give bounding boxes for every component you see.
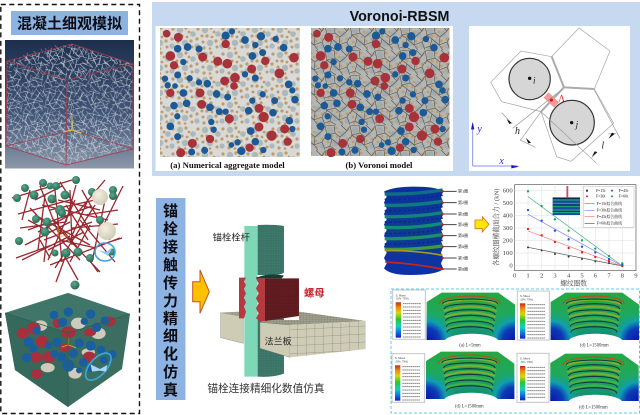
diagram: RBSM element pair: i xyxy=(533,75,536,85)
axis tick labels: 100 xyxy=(503,250,513,257)
flange plate xyxy=(221,312,366,357)
image: threaded bolt section with turn labels: 第8圈 xyxy=(458,265,468,271)
caption: 锚栓连接精细化数值仿真 xyxy=(207,382,325,395)
axis tick labels: 600 xyxy=(503,188,513,195)
axis tick labels: 7 xyxy=(607,273,611,280)
legend xyxy=(583,187,634,227)
axis tick labels: 300 xyxy=(503,225,513,232)
image: threaded bolt section with turn labels: 第4圈 xyxy=(458,221,468,227)
heading: concrete mesoscale simulation: 混凝土细观模拟 xyxy=(17,14,122,32)
nut xyxy=(239,274,299,321)
axis tick labels: 400 xyxy=(503,213,513,220)
chart: Voronoi model xyxy=(311,28,450,170)
diagram: anchor bolt finite element model xyxy=(207,225,366,395)
image: threaded bolt section with turn labels: 第5圈 xyxy=(458,232,468,238)
contour: L=1500mm bottom right: S, Mises xyxy=(520,357,531,361)
diagram: RBSM element pair: l xyxy=(601,140,604,151)
axis tick labels: 9 xyxy=(634,273,638,280)
contour: L=1500mm bottom right: (5%: 75%) xyxy=(521,360,533,364)
heading: anchor bolt contact force simulation: 接 xyxy=(163,239,178,256)
axis tick labels: 2 xyxy=(540,273,543,280)
axis tick labels: 200 xyxy=(503,237,513,244)
contour: L=1500mm bottom left xyxy=(392,352,514,409)
axis titles: 螺纹圈数 xyxy=(560,278,587,287)
legend: F=30t xyxy=(596,194,606,199)
contour: L=1500mm bottom right: (d) L=1500mm xyxy=(579,406,608,411)
contour: L=5mm: (a) L=5mm xyxy=(459,343,481,348)
contour: L=1500mm top right xyxy=(517,291,639,348)
heading: anchor bolt contact force simulation: 仿 xyxy=(163,363,178,381)
axis tick labels: 0 xyxy=(513,273,517,280)
panel: concrete mesoscale simulation xyxy=(1,4,139,414)
axis tick labels: 0 xyxy=(509,262,513,269)
axis tick labels xyxy=(503,188,638,280)
diagram: RBSM element pair xyxy=(471,28,620,168)
contour: L=5mm: (5%: 75%) xyxy=(396,297,409,301)
arrow: to bolt model xyxy=(193,270,209,313)
image: threaded bolt section with turn labels: 第2圈 xyxy=(458,199,468,205)
heading: anchor bolt contact force simulation: 传 xyxy=(163,275,178,292)
contour: L=1500mm bottom left: S, Mises xyxy=(395,356,406,360)
heading: anchor bolt contact force simulation: 细 xyxy=(163,328,178,345)
axis tick labels: 5 xyxy=(580,273,584,280)
axis tick labels: 500 xyxy=(503,200,513,207)
heading: anchor bolt contact force simulation: 锚 xyxy=(163,202,178,220)
contour: L=1500mm bottom right xyxy=(517,353,639,411)
chart: numerical aggregate model xyxy=(160,28,300,170)
axis tick labels: 1 xyxy=(526,273,530,280)
contour: L=1500mm top right: (5%: 75%) xyxy=(521,297,533,301)
axis tick labels: 8 xyxy=(621,273,625,280)
diagram: RBSM element pair: y xyxy=(476,124,482,135)
heading: anchor bolt contact force simulation xyxy=(156,198,186,400)
heading: Voronoi-RBSM: Voronoi-RBSM xyxy=(350,9,449,25)
heading: concrete mesoscale simulation xyxy=(11,11,128,35)
panel: stress contour comparison xyxy=(391,289,640,413)
heading: anchor bolt contact force simulation: 真 xyxy=(163,381,178,399)
bolt shank xyxy=(244,225,284,377)
axis titles xyxy=(492,189,587,287)
legend: F=45t拟合曲线 xyxy=(597,213,622,219)
heading: anchor bolt contact force simulation: 化 xyxy=(163,345,178,363)
legend: F=15t拟合曲线 xyxy=(597,200,622,206)
axis titles: 各螺纹圈横截面合力 / (kN) xyxy=(492,189,501,266)
axis tick labels: 6 xyxy=(594,273,598,280)
image: threaded bolt section with turn labels: 第6圈 xyxy=(458,243,468,249)
legend: F=60t拟合曲线 xyxy=(597,220,622,226)
diagram: RBSM element pair: Λ xyxy=(558,93,565,103)
legend: F=60t xyxy=(619,194,629,199)
axis tick labels: 4 xyxy=(567,273,571,280)
diagram: RBSM element pair: x xyxy=(498,156,504,167)
contour: L=1500mm bottom left: (5%: 75%) xyxy=(396,359,408,363)
axis tick labels: 3 xyxy=(553,273,557,280)
contour: L=1500mm top right: S, Mises xyxy=(520,294,531,298)
legend: F=30t拟合曲线 xyxy=(597,207,622,213)
image: threaded bolt section with turn labels: 第7圈 xyxy=(458,254,468,260)
contour: L=5mm: S, Mises xyxy=(396,293,407,297)
chart: Voronoi model: (b) Voronoi model xyxy=(346,160,413,170)
image: cube with aggregates xyxy=(5,293,130,407)
heading: anchor bolt contact force simulation: 触 xyxy=(163,257,178,274)
image: fibres and aggregate spheres xyxy=(12,176,123,290)
panel: Voronoi-RBSM xyxy=(152,2,640,176)
contour: L=1500mm bottom left: (d) L=1500mm xyxy=(455,404,484,409)
image: threaded bolt section with turn labels: 第1圈 xyxy=(458,188,468,194)
chart: numerical aggregate model: (a) Numerical aggregate model xyxy=(170,160,285,170)
label: flange: 法兰板 xyxy=(265,336,292,347)
chart: force per thread turn xyxy=(492,185,638,287)
image: threaded bolt section with turn labels xyxy=(384,187,468,275)
contour: L=5mm xyxy=(393,290,515,348)
legend: F=15t xyxy=(596,188,606,193)
diagram: RBSM element pair: j xyxy=(575,119,579,129)
heading: anchor bolt contact force simulation: 精 xyxy=(163,310,178,328)
image: threaded bolt section with turn labels: 第3圈 xyxy=(458,210,468,216)
label: nut: 螺母 xyxy=(304,286,325,299)
inset: bolt stack xyxy=(553,186,580,215)
diagram: RBSM element pair: h xyxy=(515,126,520,137)
label: bolt shank: 锚栓栓杆 xyxy=(213,231,250,242)
contour: L=1500mm top right: (d) L=1500mm xyxy=(580,343,609,348)
legend: F=45t xyxy=(619,188,629,193)
image: fibre network cube xyxy=(5,40,134,168)
heading: anchor bolt contact force simulation: 栓 xyxy=(163,220,178,238)
heading: anchor bolt contact force simulation: 力 xyxy=(163,293,178,310)
arrow: bolt to chart xyxy=(475,217,489,232)
